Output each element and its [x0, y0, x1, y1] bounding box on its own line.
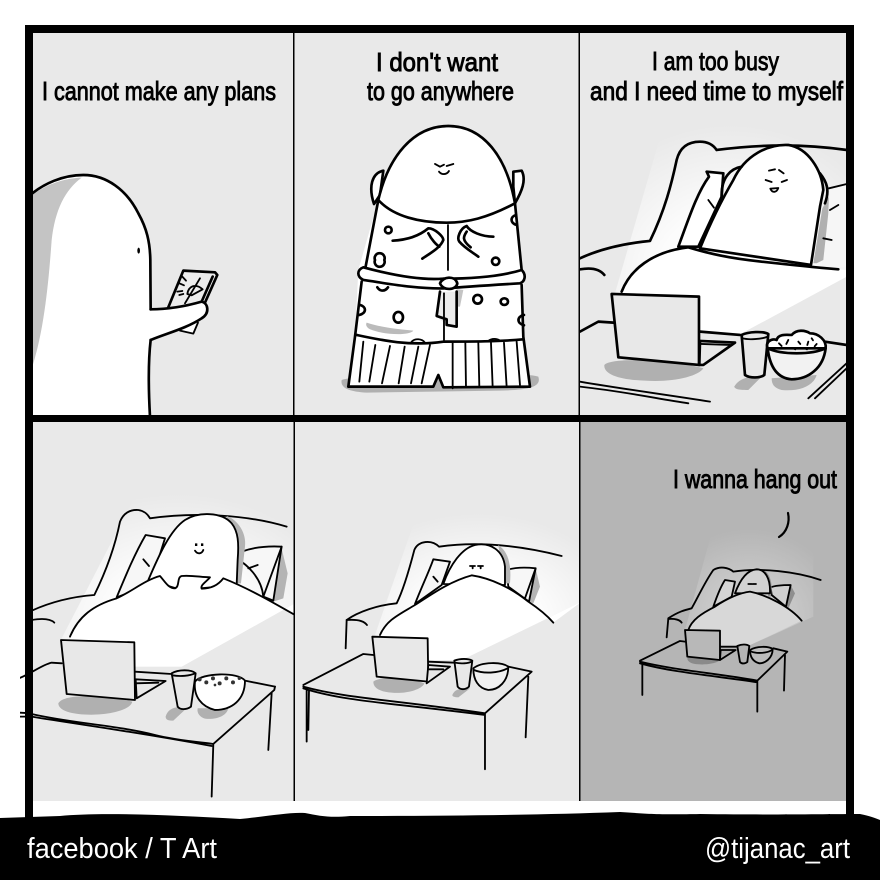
table	[640, 641, 787, 712]
pillow left	[678, 172, 723, 247]
head shadow	[765, 571, 772, 597]
dots	[359, 215, 524, 325]
glass	[166, 707, 188, 721]
laptop shadow	[58, 696, 132, 715]
blanket	[70, 576, 295, 667]
table front	[19, 687, 275, 797]
laptop glow	[616, 162, 846, 293]
character under blanket with table	[303, 510, 582, 769]
character holding phone	[27, 175, 217, 417]
character in bed with table	[19, 490, 295, 797]
panel: cannot make plans	[27, 33, 294, 417]
robe shadow	[366, 323, 413, 334]
pillow right	[785, 585, 795, 608]
body	[700, 145, 823, 265]
caption: I am too busy and I need time to myself: and I need time to myself	[590, 76, 844, 106]
head shadow	[498, 545, 510, 583]
panel: do not want to go	[294, 33, 579, 416]
sleepy eyes	[470, 566, 483, 568]
phone	[168, 270, 217, 334]
caption: I cannot make any plans: I cannot make any plans	[42, 76, 276, 106]
footer: instagram handle: @tijanac_art	[705, 833, 850, 865]
pillow left	[117, 535, 165, 597]
laptop	[685, 630, 720, 660]
laptop shadow	[373, 678, 424, 693]
laptop shadow	[687, 656, 721, 664]
sofa	[32, 510, 287, 611]
blanket	[688, 592, 802, 647]
table back	[19, 663, 275, 687]
sofa	[667, 568, 821, 637]
small character in bed with table	[640, 527, 821, 712]
glass	[734, 378, 760, 390]
hands and lapel	[393, 228, 443, 259]
hem stripes	[359, 339, 520, 388]
pillow left	[415, 559, 450, 604]
cereal bowl	[195, 674, 245, 710]
bowl	[478, 685, 502, 691]
panel: alone in the dark	[580, 422, 846, 801]
belt	[358, 267, 525, 288]
panel: in bed close view	[19, 422, 295, 801]
laptop	[612, 294, 699, 365]
eye	[137, 248, 140, 254]
caption: I wanna hang out: I wanna hang out	[673, 464, 838, 494]
table	[303, 654, 532, 769]
bowl shadow	[197, 708, 228, 719]
head	[378, 126, 515, 223]
collar flaps	[371, 171, 524, 204]
head shadow	[227, 516, 245, 583]
blanket	[380, 575, 582, 660]
laptop	[61, 640, 135, 700]
bowl	[750, 647, 773, 663]
caption: I am too busy and I need time to myself	[590, 46, 844, 106]
pillow left	[713, 580, 735, 607]
blanket	[622, 270, 846, 293]
face	[435, 164, 453, 174]
caption: I don't want to go anywhere: to go anywhere	[367, 76, 514, 106]
pillow right	[527, 568, 540, 603]
caption: I don't want to go anywhere	[367, 47, 514, 106]
table back edge	[580, 322, 847, 345]
glass	[737, 644, 749, 663]
character in bathrobe	[341, 126, 539, 393]
face	[766, 169, 787, 182]
panel: too busy	[580, 33, 847, 416]
right pillow	[835, 186, 846, 198]
popcorn bowl	[767, 331, 826, 348]
bowl shadow	[772, 375, 817, 390]
caption: I am too busy and I need time to myself: I am too busy	[652, 46, 779, 76]
footer: facebook credit: facebook / T Art	[27, 833, 217, 865]
glass	[452, 688, 470, 697]
table front	[580, 363, 847, 403]
white gutter	[33, 801, 846, 817]
caption: I don't want to go anywhere: I don't want	[376, 47, 499, 77]
panel: in bed medium view	[294, 422, 582, 801]
sofa	[580, 142, 847, 258]
pillow right	[273, 548, 288, 602]
head	[148, 514, 238, 590]
laptop	[372, 637, 428, 682]
footer band	[0, 812, 880, 880]
head	[443, 544, 505, 585]
sofa	[346, 542, 562, 648]
laptop shadow	[604, 360, 703, 381]
head	[735, 569, 770, 593]
speech tick	[779, 513, 789, 537]
character on sofa with laptop and popcorn	[580, 120, 847, 403]
